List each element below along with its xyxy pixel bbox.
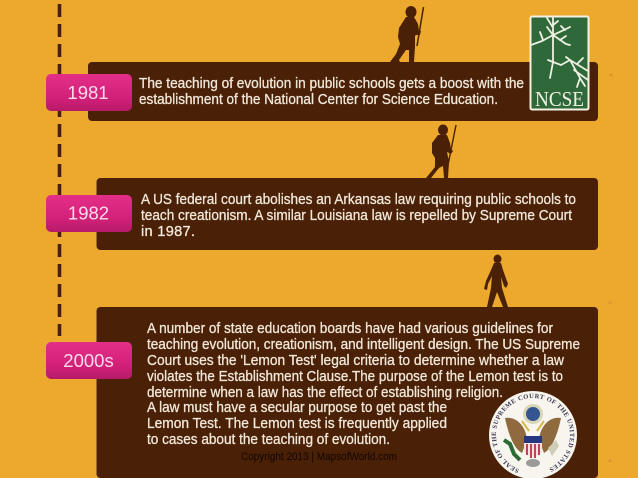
olive branch [504,440,520,460]
text: 2000s description: A law must have a secular purpose to get past the [147,400,447,416]
text: 2000s description: Lemon Test. The Lemon test is frequently applied [147,416,447,432]
text: 2000s description: Court uses the 'Lemon Test' legal criteria to determine whether a law [147,353,564,369]
badge: 1982 [46,195,132,232]
text: NCSE: NCSE [535,87,584,111]
timeline dashed line [58,4,61,336]
text: 2000s description [147,321,580,448]
icon: NCSE logo [530,16,588,111]
text: 1982 description [141,192,576,240]
text: 1981 description [139,76,524,108]
text: 2000s description: teaching evolution, creationism, and intelligent design. The US Supreme [147,337,580,353]
text: 2000s description: A number of state education boards have had various guidelines for [147,321,553,337]
text: seal ring: SEAL OF THE SUPREME COURT OF THE UNITED STATES [492,394,574,473]
text: 1982 description: A US federal court abolishes an Arkansas law requiring public schools to [141,192,576,208]
eagle wings [505,418,527,453]
text: 1981 description: The teaching of evolution in public schools gets a boost with the [139,76,524,92]
copyright: Copyright 2013 | MapsofWorld.com [241,451,397,463]
shield [524,437,542,456]
text: 2000s description: determine when a law has the effect of establishing religion. [147,385,503,401]
panel: 1981 [88,62,598,121]
text: 1981 description: establishment of the National Center for Science Education. [139,92,498,108]
panel: 1982 [96,178,598,250]
figure: walking human 2000s [484,254,508,307]
text: 1982 description: teach creationism. A similar Louisiana law is repelled by Supreme Court [141,208,572,224]
panel: 2000s [96,307,598,478]
badge: 1981: 1981 [67,82,109,103]
badge: 2000s [46,342,132,379]
badge: 1982: 1982 [68,202,109,224]
figure: early human with spear 1981 [390,6,424,62]
text: 2000s description: to cases about the teaching of evolution. [147,432,390,448]
icon: Supreme Court seal [489,391,577,478]
faint marks [608,74,612,462]
text: 1982 description: in 1987. [141,224,195,240]
seal crest [523,404,543,424]
arrows [548,440,559,456]
figure: early human with spear 1982 [426,124,456,178]
badge: 1981 [46,74,132,111]
text: 2000s description: violates the Establishment Clause.The purpose of the Lemon test is to [147,369,563,385]
badge: 2000s: 2000s [63,350,114,371]
